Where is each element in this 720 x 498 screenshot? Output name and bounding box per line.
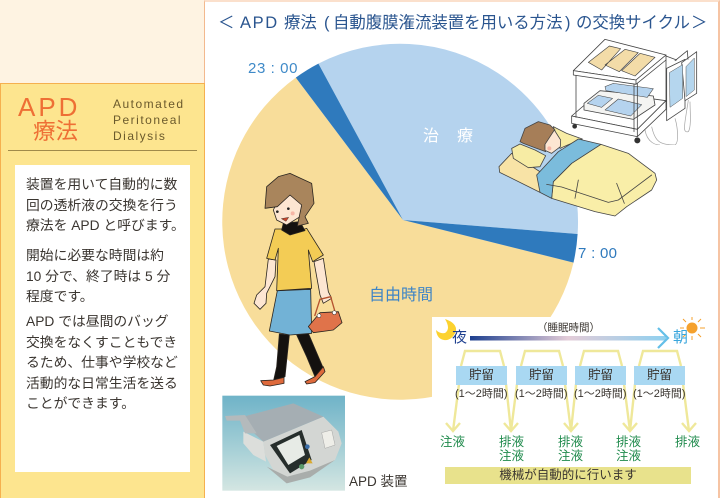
duration 1: (1～2時間): [455, 388, 508, 400]
mouth: [281, 217, 289, 221]
bags: [667, 59, 685, 121]
step: drain and fill 1: 注液: [499, 449, 524, 463]
paragraph 3: ことができます。: [26, 396, 135, 411]
duration 3: (1～2時間): [574, 388, 627, 400]
top shelf: [573, 39, 666, 80]
step: drain and fill 2: 排液: [558, 435, 583, 449]
label: treatment: 治療: [423, 128, 491, 145]
storage box 3: [575, 366, 626, 385]
neck: [282, 222, 305, 235]
automatic banner: 機械が自動的に行います: [499, 468, 637, 482]
paragraph 2: 開始に必要な時間は約: [26, 248, 164, 263]
slice: treatment: [318, 44, 578, 234]
step: drain and fill 3: 排液: [616, 435, 641, 449]
label: free time: 自由時間: [369, 287, 433, 304]
photo: APD device: [222, 396, 345, 491]
automatic banner: [445, 467, 691, 484]
paragraph 3: 交換をなくすこともでき: [26, 334, 177, 350]
English subtitle: Peritoneal: [113, 113, 182, 127]
paragraph 2: 10 分で、終了時は 5 分: [26, 268, 170, 284]
paragraph 3: [26, 314, 178, 411]
illustration: dialysis machine: [571, 38, 698, 145]
tubes: [645, 100, 690, 145]
step: drain and fill 2: [558, 435, 583, 463]
night label: 夜: [452, 329, 467, 346]
storage box 2: 貯留: [529, 368, 554, 382]
legs: [273, 333, 323, 382]
moon icon: [436, 319, 456, 340]
blue sheet: [537, 139, 601, 198]
eyes: [276, 207, 290, 213]
bag handle: [315, 297, 335, 316]
storage box 1: 貯留: [469, 368, 494, 382]
heading: therapy: 療法: [33, 119, 78, 144]
chart title: 自動腹膜潅流装置を用いる方法: [333, 14, 562, 32]
legs: [576, 60, 666, 132]
hair: [265, 173, 314, 226]
English subtitle: Dialysis: [113, 129, 166, 143]
slice: free time: [222, 78, 573, 400]
panel: APD therapy: [0, 83, 205, 498]
step: drain and fill 3: [616, 435, 641, 463]
chart title: (: [324, 14, 329, 32]
chart title: ＜: [218, 14, 234, 32]
right arm: [314, 258, 332, 303]
panel: overnight cycle: [432, 317, 717, 498]
cycle diagram: [436, 317, 705, 433]
face: [273, 195, 304, 225]
paragraph 1: 療法を APD と呼びます。: [26, 218, 185, 233]
skirt: [269, 289, 312, 335]
paragraph 2: 程度です。: [26, 289, 94, 304]
paragraph 1: [26, 177, 185, 233]
duration 2: (1～2時間): [515, 388, 568, 400]
paragraph 3: るため、仕事や学校など: [26, 355, 178, 370]
paragraph 3: APD では昼間のバッグ: [26, 314, 169, 329]
chart title: ＞: [691, 14, 707, 32]
illustration: walking woman: [254, 172, 342, 386]
English subtitle: [113, 97, 185, 143]
quilt folds: [547, 175, 652, 203]
base unit: [584, 91, 655, 119]
paragraph 2: [26, 248, 170, 304]
device caption: APD 装置: [349, 474, 408, 489]
storage box 3: 貯留: [588, 368, 613, 382]
time arrow: [470, 328, 668, 348]
mattress: [499, 153, 545, 192]
middle tray: [605, 83, 653, 97]
paragraph 1: 回の透析液の交換を行う: [26, 198, 178, 212]
wheels: [572, 124, 577, 129]
back pillow: [553, 127, 582, 148]
cheek: [291, 211, 295, 215]
heading: APD: APD: [18, 92, 80, 122]
slice: 23:00 marker: [296, 64, 403, 220]
step: drain and fill 1: 排液: [499, 435, 524, 449]
chart title: APD: [240, 14, 279, 32]
shoes: [261, 367, 325, 386]
paragraph 3: 活動的な日常生活を送る: [26, 376, 178, 390]
quilt: [552, 144, 657, 216]
chart title: ): [565, 14, 570, 32]
page frame: [204, 0, 720, 498]
sleep time label: （睡眠時間）: [537, 322, 600, 334]
step: drain and fill 3: 注液: [616, 449, 641, 463]
hair: [520, 122, 555, 152]
duration 4: (1～2時間): [633, 388, 686, 400]
slice: 7:00 marker: [403, 220, 578, 263]
label: 7:00: 7 : 00: [578, 245, 617, 262]
left arm: [254, 259, 276, 309]
pillow: [512, 144, 546, 168]
step: fill: 注液: [440, 435, 465, 449]
bottom shelf: [572, 92, 666, 129]
face: [545, 130, 561, 153]
chart title: の交換サイクル: [576, 14, 690, 32]
trays: [588, 46, 655, 76]
shirt: [267, 228, 323, 291]
connectors: [446, 351, 696, 431]
chart title: 療法: [284, 14, 317, 32]
step: drain and fill 1: [499, 435, 524, 463]
step: drain and fill 2: 注液: [558, 449, 583, 463]
illustration: sleeping patient: [498, 121, 657, 216]
chart title: [218, 14, 707, 32]
storage box 4: 貯留: [647, 368, 672, 382]
top left cream block: [0, 0, 204, 83]
paragraph 1: 装置を用いて自動的に数: [26, 177, 177, 192]
description card: [15, 165, 190, 472]
bag clasps: [317, 311, 336, 318]
step: drain: 排液: [675, 435, 700, 449]
morning label: 朝: [673, 329, 688, 346]
storage box 2: [516, 366, 567, 385]
handbag: [308, 312, 342, 333]
storage box 4: [634, 366, 685, 385]
English subtitle: Automated: [113, 97, 185, 111]
storage box 1: [456, 366, 507, 385]
sun icon: [680, 316, 705, 340]
heading rule: [8, 150, 197, 151]
cheek: [547, 146, 551, 150]
label: 23:00: 23 : 00: [248, 60, 298, 77]
